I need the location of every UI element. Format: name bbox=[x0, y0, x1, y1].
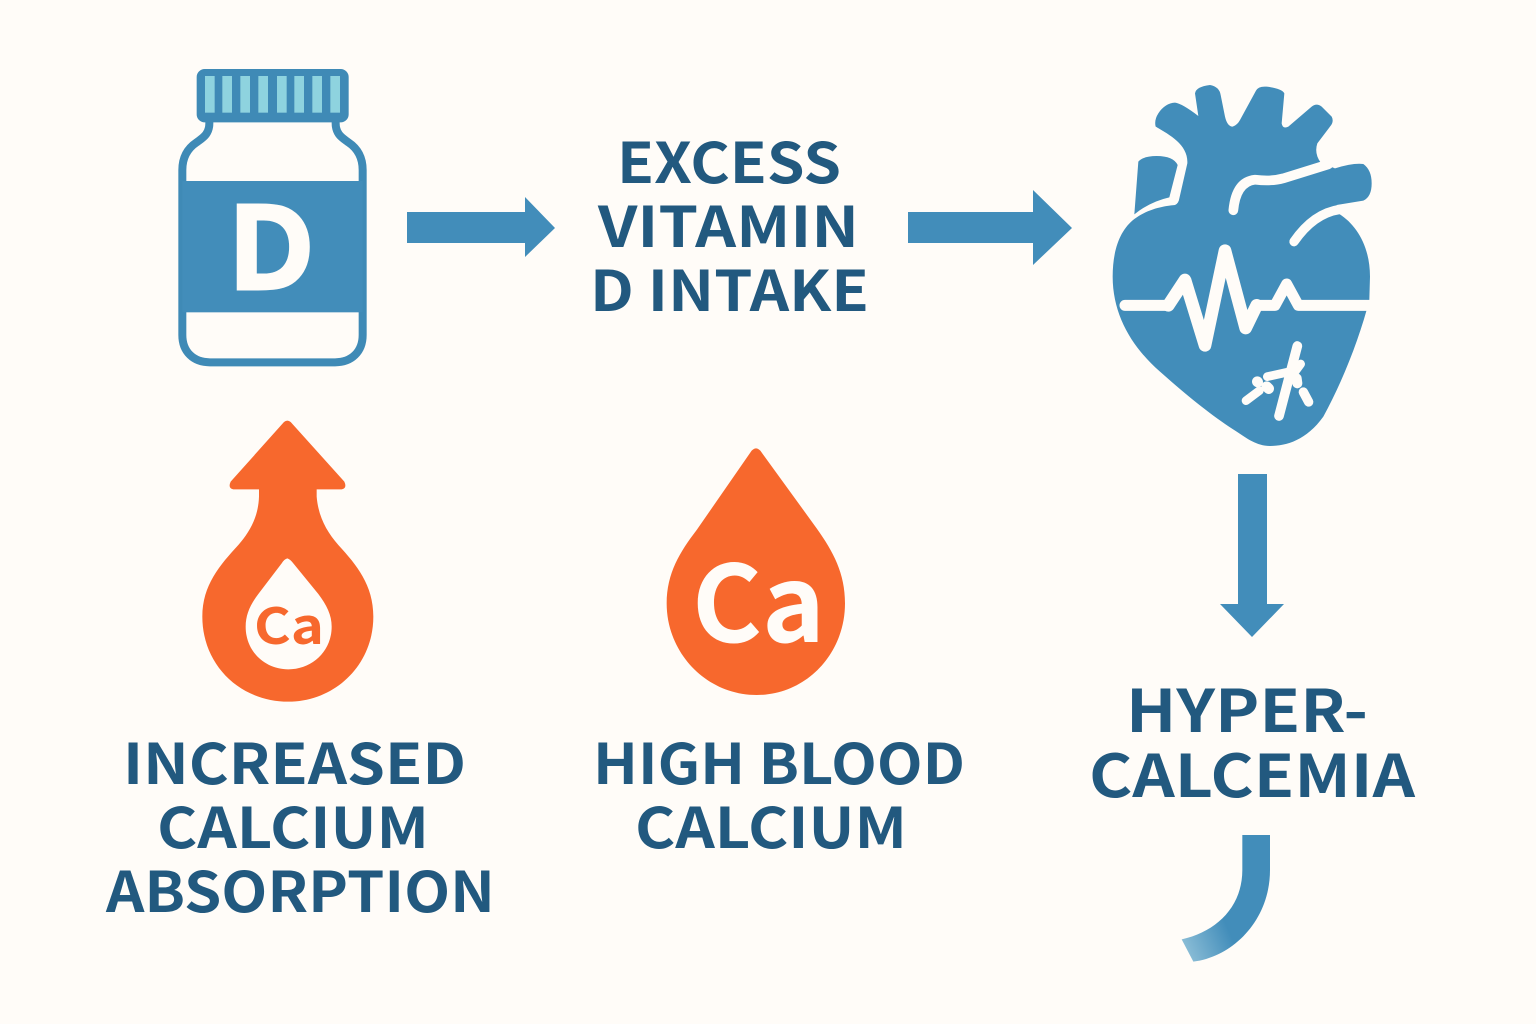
arrow: bottle to excess intake bbox=[407, 197, 555, 257]
white gaps bbox=[1125, 164, 1373, 416]
icon: orange calcium drop: Ca bbox=[692, 519, 825, 673]
label: hypercalcemia: CALCEMIA bbox=[1089, 729, 1416, 814]
icon: orange calcium drop bbox=[667, 448, 845, 695]
icon: orange up arrow drop with Ca bbox=[202, 421, 373, 702]
label: high blood calcium bbox=[593, 720, 965, 865]
label: high blood calcium: CALCIUM bbox=[635, 784, 907, 865]
ECG spikes bbox=[1168, 251, 1257, 345]
arrow: heart down to hypercalcemia bbox=[1220, 474, 1284, 637]
calcifications bbox=[1279, 346, 1297, 416]
arrow: intake to heart bbox=[908, 190, 1072, 265]
heading: excess vitamin D intake bbox=[590, 119, 869, 328]
heading: excess vitamin D intake: D INTAKE bbox=[590, 247, 869, 328]
label: increased calcium absorption: INCREASED bbox=[123, 720, 466, 801]
icon: vitamin D bottle bbox=[182, 69, 363, 362]
heart body bbox=[1113, 85, 1372, 446]
label: hypercalcemia bbox=[1089, 664, 1416, 814]
label: high blood calcium: HIGH BLOOD bbox=[593, 720, 965, 801]
icon: orange up arrow drop with Ca: Ca bbox=[254, 587, 324, 659]
icon: vitamin D bottle: D bbox=[227, 180, 315, 319]
label: increased calcium absorption: ABSORPTION bbox=[105, 848, 495, 929]
icon: heart with ECG trace and calcifications bbox=[1113, 85, 1373, 446]
label: increased calcium absorption bbox=[105, 720, 495, 929]
arrow: curved fading tail bbox=[1182, 835, 1270, 962]
label: hypercalcemia: HYPER- bbox=[1126, 664, 1368, 749]
atrium appendage bbox=[1134, 156, 1178, 214]
heading: excess vitamin D intake: EXCESS bbox=[617, 119, 841, 200]
heading: excess vitamin D intake: VITAMIN bbox=[597, 183, 859, 264]
ECG baseline bbox=[1125, 284, 1373, 305]
label: increased calcium absorption: CALCIUM bbox=[157, 784, 429, 865]
